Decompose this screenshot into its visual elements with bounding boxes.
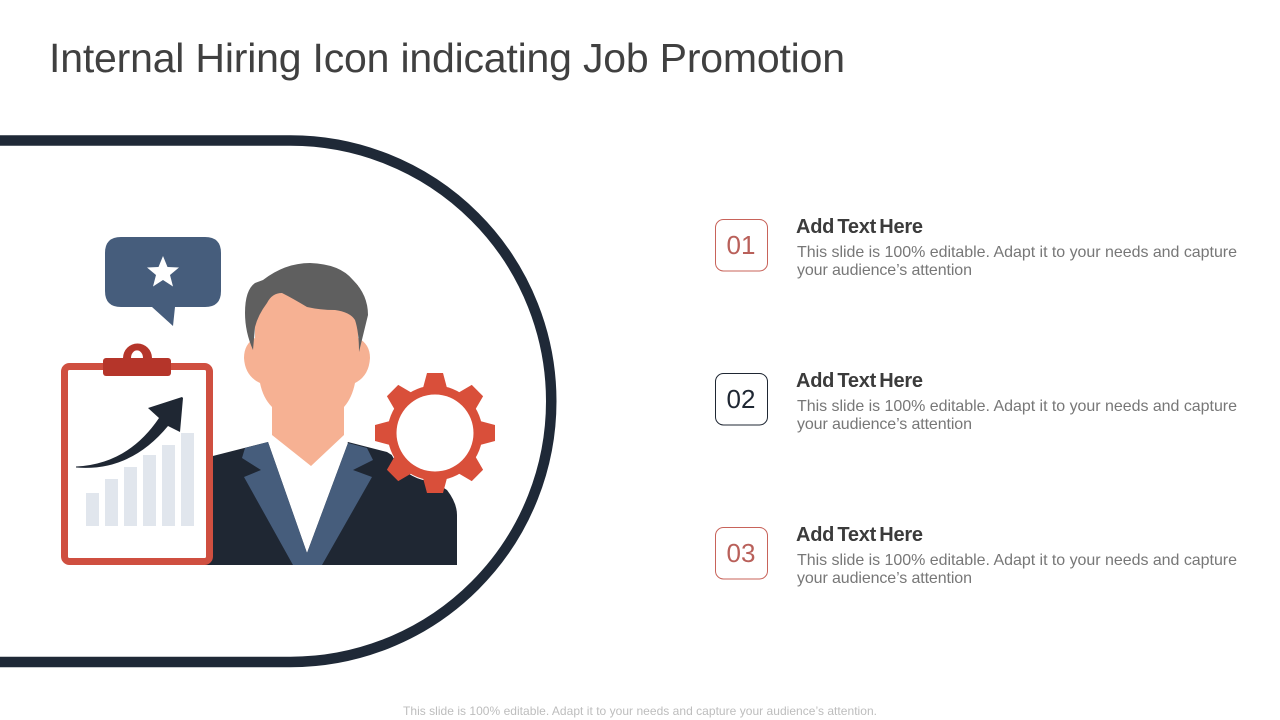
description 01: This slide is 100% editable. Adapt it to your needs and capture — [797, 244, 1237, 261]
illustration: businessman with clipboard — [64, 237, 495, 565]
rounded arc frame — [0, 140, 551, 662]
heading 01: Add Text Here — [796, 216, 923, 238]
bars — [86, 433, 194, 526]
lapel right — [293, 443, 373, 565]
description 01 — [797, 244, 1237, 279]
item 01: 01 — [727, 230, 755, 260]
icon: person — [205, 263, 457, 565]
description 03 — [797, 552, 1237, 587]
number box 03 — [716, 528, 768, 579]
number box 01 — [716, 220, 768, 271]
description 03: This slide is 100% editable. Adapt it to your needs and capture — [797, 552, 1237, 569]
number box 02 — [716, 374, 768, 425]
description 02: This slide is 100% editable. Adapt it to your needs and capture — [797, 398, 1237, 415]
description 02: your audience’s attention — [797, 416, 972, 433]
description 03: your audience’s attention — [797, 570, 972, 587]
heading 02: Add Text Here — [796, 370, 923, 392]
shirt — [268, 435, 348, 553]
face and neck — [244, 285, 370, 466]
lapel left — [242, 442, 322, 565]
item 03 — [716, 524, 1237, 587]
suit — [205, 442, 457, 565]
growth arrow — [76, 397, 183, 468]
icon: clipboard with growth chart — [64, 344, 210, 562]
description 01: your audience’s attention — [797, 262, 972, 279]
icon: speech bubble with star — [105, 237, 221, 326]
item 02 — [716, 370, 1237, 433]
item 03: 03 — [727, 538, 755, 568]
clip — [103, 358, 171, 376]
item 02: 02 — [727, 384, 755, 414]
clip ring — [123, 344, 152, 358]
icon: gear — [375, 373, 495, 493]
description 02 — [797, 398, 1237, 433]
footer note: This slide is 100% editable. Adapt it to your needs and capture your audience’s attention. — [403, 704, 877, 718]
title: Internal Hiring Icon indicating Job Promotion — [49, 35, 845, 81]
item 01 — [716, 216, 1237, 279]
hair — [245, 263, 368, 352]
heading 03: Add Text Here — [796, 524, 923, 546]
